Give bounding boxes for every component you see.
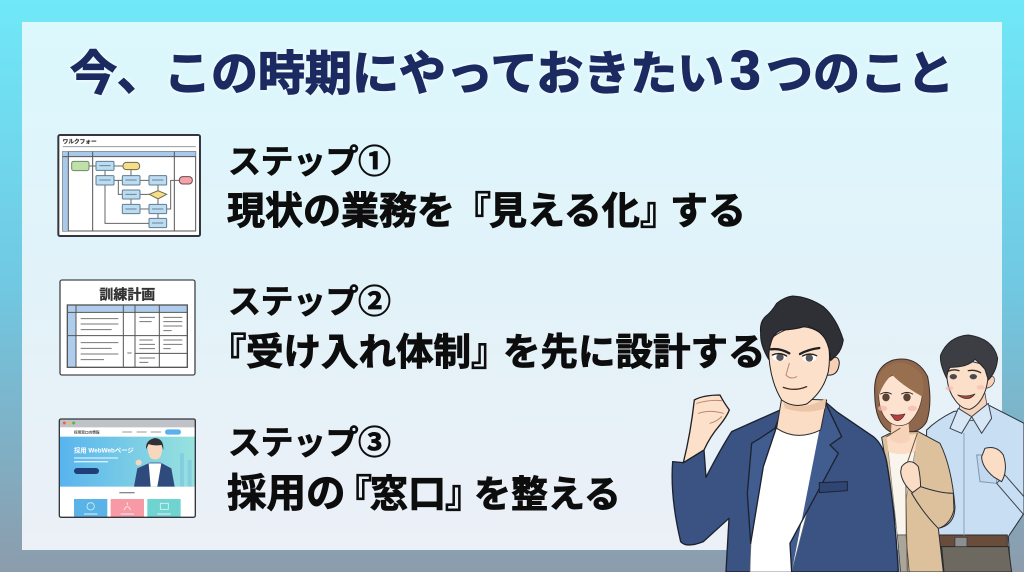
thumbnail: workflow diagram [58,135,200,236]
step 2 text: を先に設計する [503,331,766,373]
step 3 text: 窓口 [370,474,446,516]
thumbnail: recruitment web page [59,419,195,517]
step 1 text [227,143,746,233]
man in blue shirt [925,335,1024,572]
title: つのこと [766,47,954,100]
step 2 text: 受け入れ体制 [246,331,471,373]
thumbnail: training plan table [60,280,195,375]
title: 3 [730,39,761,101]
thumbnail: recruitment web page: 採用 WebWebページ [74,446,134,455]
step 2 text: 』 [471,331,508,373]
main man in navy jacket [672,296,898,572]
step 1 text: 見える化 [489,191,640,233]
step 2 text [209,283,766,373]
step 2 text: 『 [209,331,246,373]
step 1 text: 現状の業務を [227,191,455,233]
step 3 text: 』 [445,474,483,516]
step 3 text: ステップ③ [228,424,391,461]
step 1 text: 『 [453,191,491,233]
title: 今、この時期にやっておきたい [70,47,724,100]
thumbnail: recruitment web page: 採用窓口の情報 [74,429,100,434]
step 3 text: 『 [334,474,372,516]
step 3 text: 採用の [227,472,346,516]
characters illustration [672,296,1024,572]
woman in cardigan [875,359,955,572]
thumbnail: workflow diagram: ワルクフォー [63,138,97,146]
step 1 text: する [670,191,746,233]
step 3 text [227,424,621,516]
step 2 text: ステップ② [228,283,391,320]
step 1 text: ステップ① [228,143,391,180]
step 3 text: を整える [474,474,621,515]
thumbnail: training plan table: 訓練計画 [99,286,155,302]
step 1 text: 』 [640,191,678,233]
